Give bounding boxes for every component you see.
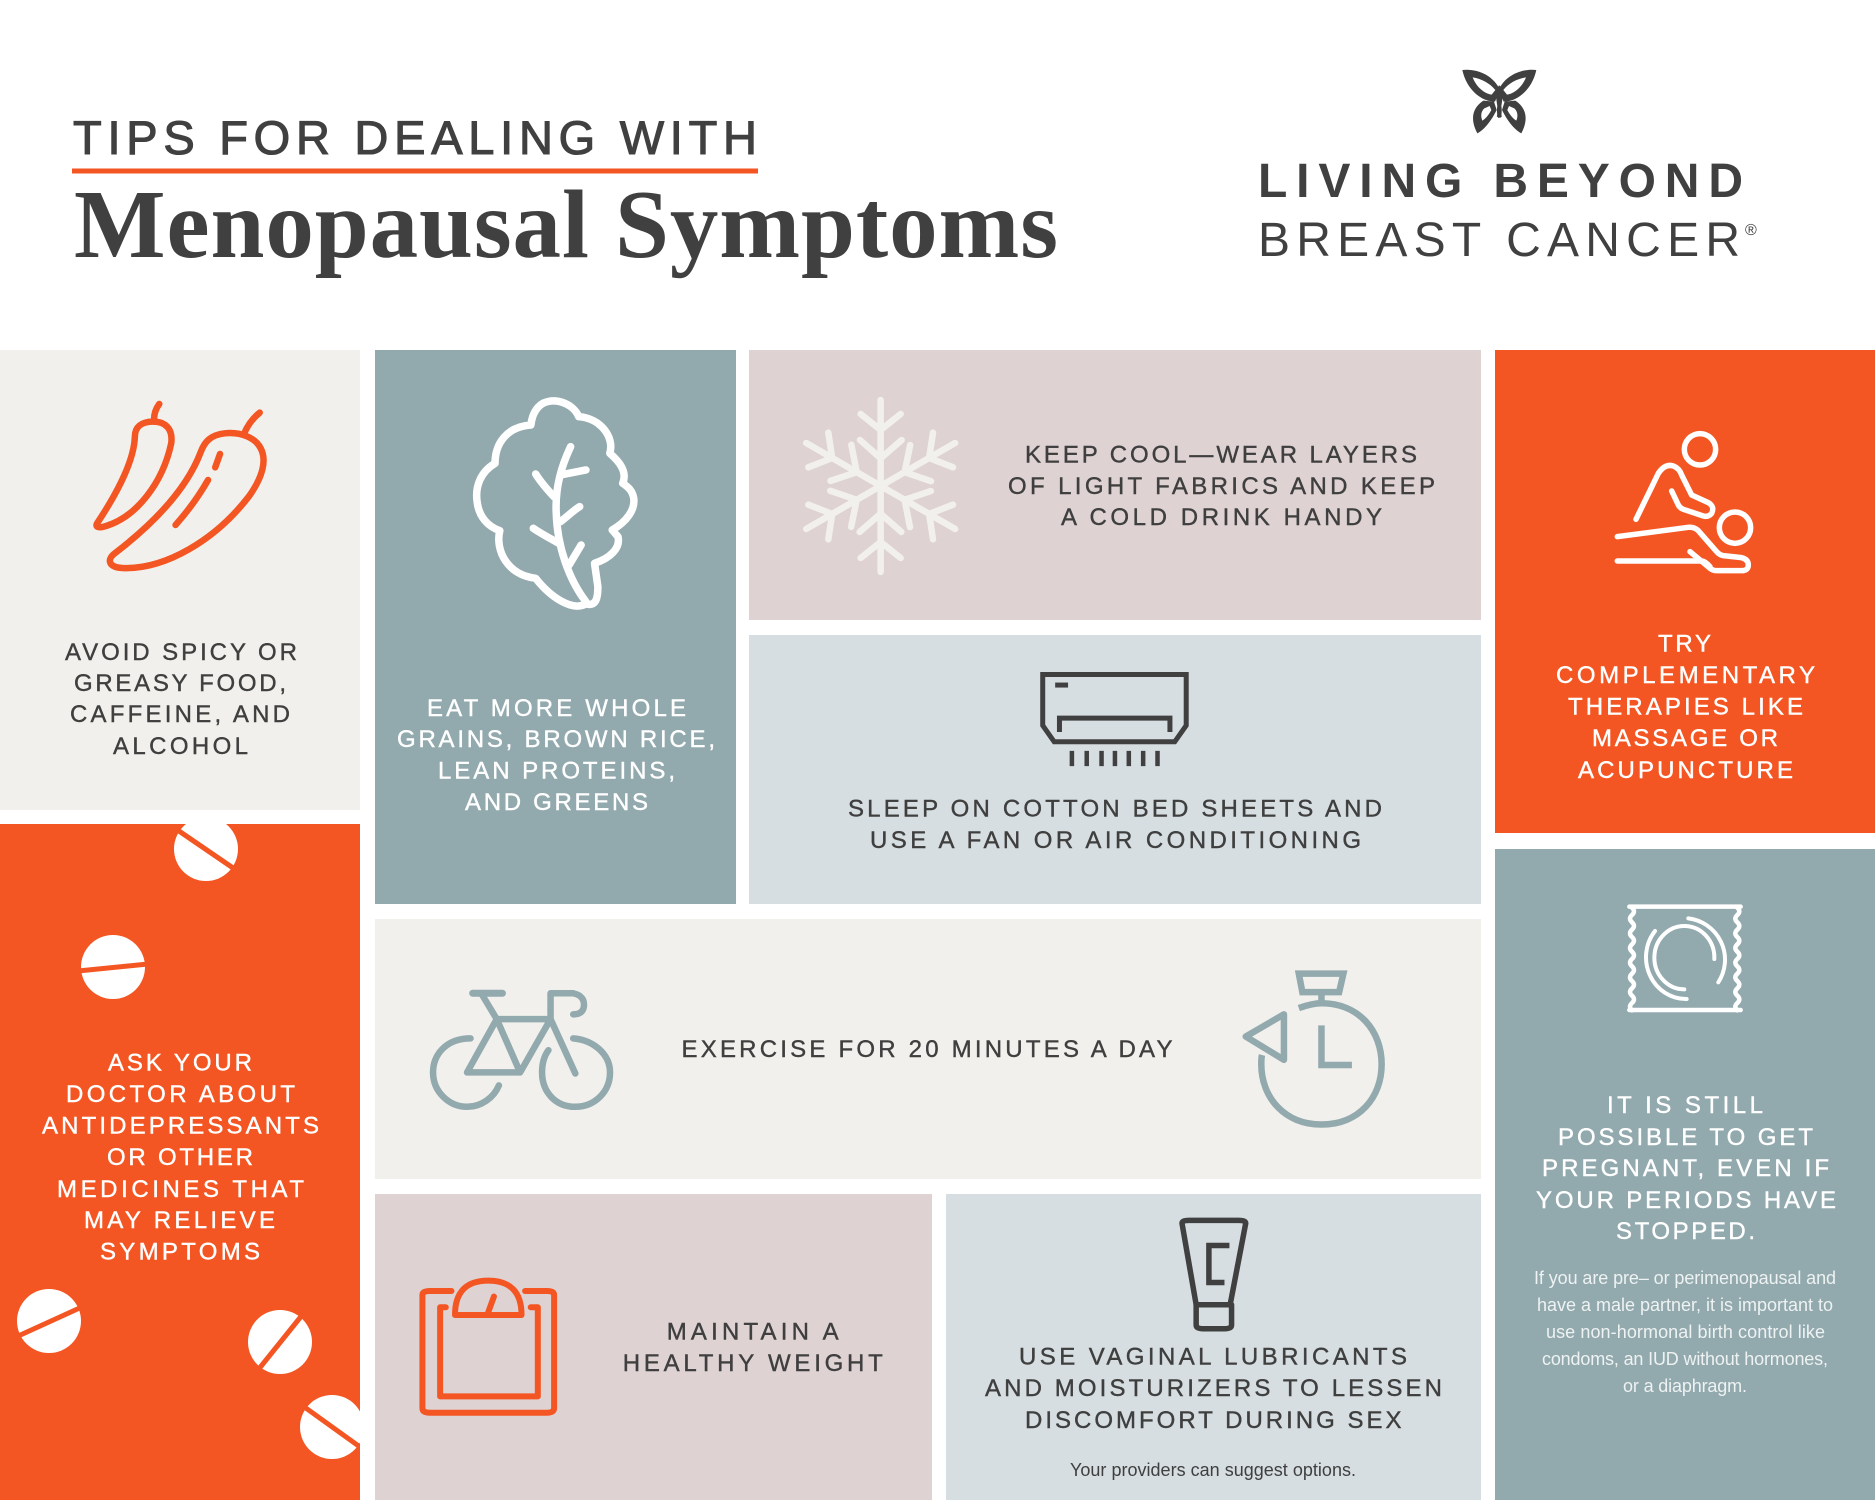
text: pregnancy warning: PREGNANT, EVEN IF [1542, 1155, 1829, 1182]
text: avoid spicy: CAFFEINE, AND [70, 701, 290, 728]
text: keep cool: A COLD DRINK HANDY [1061, 504, 1382, 531]
text: use vaginal lubricants: USE VAGINAL LUBRICANTS [1019, 1344, 1407, 1370]
text: exercise: EXERCISE FOR 20 MINUTES A DAY [682, 1036, 1172, 1063]
header: logo [1258, 70, 1757, 267]
text: eat whole grains [397, 695, 715, 816]
text: keep cool: KEEP COOL—WEAR LAYERS [1025, 442, 1417, 468]
text: birth control details: use non-hormonal birth control like [1546, 1322, 1825, 1342]
icon: bicycle [433, 993, 610, 1107]
text: ask your doctor: MAY RELIEVE [84, 1207, 275, 1234]
logo name line 1: LIVING BEYOND [1258, 155, 1743, 208]
text: eat whole grains: LEAN PROTEINS, [438, 758, 675, 784]
text: ask your doctor: DOCTOR ABOUT [66, 1081, 295, 1108]
logo name line 2: BREAST CANCER [1258, 214, 1740, 267]
panel: vaginal lubricants [946, 1194, 1481, 1500]
text: ask your doctor: ANTIDEPRESSANTS [42, 1112, 319, 1140]
header: title [72, 111, 1058, 278]
icon: pill 3 [16, 1289, 84, 1353]
text: eat whole grains: EAT MORE WHOLE [427, 695, 686, 722]
text: maintain weight: MAINTAIN A [667, 1318, 839, 1346]
text: complementary therapies: THERAPIES LIKE [1568, 694, 1803, 720]
text: use vaginal lubricants [985, 1344, 1442, 1434]
text: birth control details: have a male partner, it is important to [1537, 1295, 1833, 1315]
text: complementary therapies: MASSAGE OR [1592, 725, 1778, 752]
icon: pill 2 [78, 935, 148, 999]
text: avoid spicy [65, 639, 297, 760]
text: pregnancy warning: YOUR PERIODS HAVE [1536, 1187, 1836, 1214]
panel: maintain healthy weight [375, 1194, 932, 1500]
text: avoid spicy: GREASY FOOD, [74, 670, 286, 697]
panel: sleep on cotton [749, 635, 1481, 904]
main title: Menopausal Symptoms [74, 171, 1058, 278]
text: sleep on cotton: USE A FAN OR AIR CONDITIONING [870, 827, 1361, 854]
panel: still possible to get pregnant [1495, 849, 1875, 1500]
text: pregnancy warning: POSSIBLE TO GET [1558, 1124, 1813, 1151]
panel: avoid spicy food [0, 350, 360, 810]
icon: pill 5 [300, 1390, 368, 1464]
icon: leafy green [477, 401, 634, 606]
icon: lubricant tube [1182, 1220, 1246, 1329]
text: providers note: Your providers can suggest options. [1070, 1460, 1356, 1480]
text: eat whole grains: GRAINS, BROWN RICE, [397, 726, 715, 753]
text: maintain weight: HEALTHY WEIGHT [623, 1350, 883, 1377]
text: birth control details: or a diaphragm. [1623, 1376, 1747, 1396]
text: avoid spicy: ALCOHOL [113, 733, 248, 760]
text: birth control details: condoms, an IUD without hormones, [1542, 1349, 1828, 1369]
text: maintain weight [623, 1318, 883, 1377]
text: pregnancy warning [1536, 1092, 1836, 1245]
registered mark: ® [1745, 222, 1757, 239]
text: pregnancy warning: STOPPED. [1616, 1218, 1755, 1245]
text: ask your doctor: ASK YOUR [108, 1050, 252, 1076]
text: sleep on cotton: SLEEP ON COTTON BED SHEETS AND [848, 796, 1382, 822]
text: birth control details [1534, 1268, 1836, 1396]
text: use vaginal lubricants: DISCOMFORT DURING SEX [1025, 1407, 1402, 1434]
panel: exercise [375, 919, 1481, 1179]
icon: pill 1 [174, 817, 238, 881]
text: birth control details: If you are pre– or perimenopausal and [1534, 1268, 1836, 1288]
icon: scale [422, 1281, 554, 1413]
text: complementary therapies: COMPLEMENTARY [1556, 662, 1815, 689]
text: pregnancy warning: IT IS STILL [1607, 1092, 1763, 1119]
panel: keep cool [749, 350, 1481, 620]
text: ask your doctor: OR OTHER [107, 1144, 253, 1171]
text: use vaginal lubricants: AND MOISTURIZERS TO LESSEN [985, 1375, 1442, 1402]
text: keep cool [1008, 442, 1435, 531]
text: complementary therapies [1556, 630, 1815, 784]
panel: ask your doctor [0, 817, 368, 1500]
text: sleep on cotton [848, 796, 1382, 854]
title kicker: TIPS FOR DEALING WITH [73, 111, 757, 164]
text: keep cool: OF LIGHT FABRICS AND KEEP [1008, 473, 1435, 500]
orange underline [72, 168, 758, 174]
text: ask your doctor: MEDICINES THAT [57, 1176, 304, 1203]
text: ask your doctor [42, 1050, 319, 1266]
panel: eat whole grains [375, 350, 736, 904]
text: eat whole grains: AND GREENS [465, 789, 648, 816]
icon: air conditioner [1043, 675, 1186, 766]
panel: complementary therapies [1495, 350, 1875, 833]
text: complementary therapies: TRY [1658, 630, 1711, 658]
icon: snowflake [796, 400, 966, 572]
text: avoid spicy: AVOID SPICY OR [65, 639, 297, 666]
text: complementary therapies: ACUPUNCTURE [1578, 757, 1793, 784]
icon: chili peppers [96, 404, 264, 568]
icon: massage [1617, 434, 1751, 571]
text: ask your doctor: SYMPTOMS [100, 1238, 260, 1266]
icon: condom wrapper [1629, 907, 1741, 1010]
icon: pill 4 [248, 1310, 312, 1374]
icon: butterfly logo [1462, 70, 1536, 133]
icon: stopwatch [1246, 974, 1382, 1125]
